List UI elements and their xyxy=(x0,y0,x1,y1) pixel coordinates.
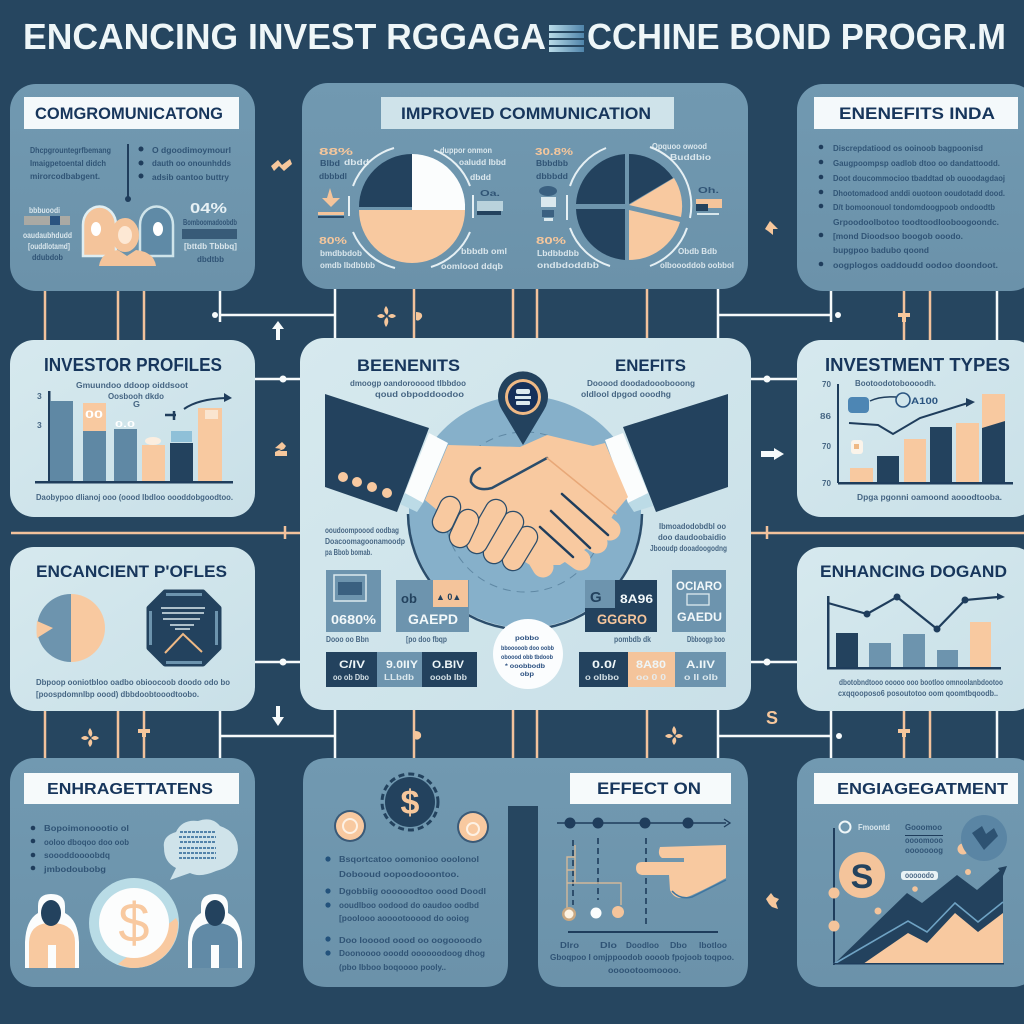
stats right xyxy=(182,200,237,264)
decorative marks xyxy=(81,159,910,909)
stat card 3: 8A96 xyxy=(620,592,653,606)
bullet list: Bsqortcatoo oomonioo ooolonol xyxy=(339,854,479,864)
labels: left pie xyxy=(319,146,507,271)
text block: upper right: oldlool dpgod ooodhg xyxy=(581,389,671,399)
panel: communicating xyxy=(10,84,255,291)
heading: communicating xyxy=(24,97,239,129)
labels: left pie: dbbbdl xyxy=(319,171,347,181)
caption: chart: Dpga pgonni oamoond aooodtooba. xyxy=(857,492,1002,502)
labels and caption: Dlro xyxy=(560,940,579,950)
decorative marks: S xyxy=(766,708,778,728)
heading: improved communication: IMPROVED COMMUNICATION xyxy=(401,104,651,123)
arrow: right xyxy=(761,448,784,460)
bullet list xyxy=(138,145,231,182)
text block xyxy=(36,677,230,699)
bullet list: oogplogos oaddoudd oodoo doondoot. xyxy=(833,260,998,270)
icon: coin: $ xyxy=(118,891,150,954)
background circle xyxy=(408,396,642,628)
stat strip right xyxy=(579,652,726,687)
stat card 2: [po doo fbqp xyxy=(406,634,447,644)
chart caption top: Bootoodotoboooodh. xyxy=(855,378,936,388)
text block: upper left: qoud obpoddoodoo xyxy=(375,389,464,399)
icon: pointing hand xyxy=(636,845,726,898)
icon: handshake xyxy=(425,435,628,567)
bar chart: 0.0 xyxy=(115,420,136,429)
labels: right pie: Lbdbbdbb xyxy=(537,249,579,258)
bar and line chart xyxy=(820,379,1013,488)
bullet list: adsib oantoo buttry xyxy=(152,172,229,182)
panel: encancient profiles xyxy=(10,547,255,711)
labels: left pie: duppor onmon xyxy=(440,146,492,155)
labels: right pie: Bbbdbb xyxy=(536,158,568,168)
panel: engagement xyxy=(797,758,1024,987)
stats right: dbdtbb xyxy=(197,254,224,264)
stat card 3: G xyxy=(590,589,602,606)
bar and line chart: 70 xyxy=(822,441,831,451)
legend and labels: ooooodo xyxy=(905,870,934,880)
icons: small pie icons xyxy=(318,185,722,221)
bullet list: (pbo Ibboo boqoooo pooly.. xyxy=(339,962,446,972)
stats left: ddubdob xyxy=(32,252,63,262)
panel: enhancing dogand xyxy=(797,547,1024,711)
labels: right pie: Buddbio xyxy=(670,153,711,162)
icon: people xyxy=(83,206,173,266)
panel: bottom centre xyxy=(303,758,748,987)
bar and line chart: A100 xyxy=(911,396,938,406)
stat strip right: 8A80 xyxy=(636,659,666,671)
stat card 3: pombdb dk xyxy=(614,634,651,644)
bullet list: D/t bomoonouol tondomdoogpoob ondoodtb xyxy=(833,202,995,212)
stat strip right: oo 0 0 xyxy=(636,673,667,682)
stat card 4: GAEDU xyxy=(677,610,722,624)
text block: upper left xyxy=(350,378,466,399)
stat card 1 xyxy=(326,570,381,644)
area chart xyxy=(833,828,1007,965)
bullet list: [poolooo aooootooood do ooiog xyxy=(339,913,469,923)
bullet list: Doot doucommocioo tbaddtad ob ouoodagdaoj xyxy=(833,173,1005,183)
caption: chart: Daobypoo dlianoj ooo (oood Ibdloo oooddobgoodtoo. xyxy=(36,492,233,502)
bullet list: Dobooud oopoodooontoo. xyxy=(339,869,459,879)
stat card 1: Dooo oo Bbn xyxy=(326,634,369,644)
bullet list: ooloo dboqoo doo oob xyxy=(44,837,129,847)
icon: person right xyxy=(188,894,242,968)
bar chart: 3 xyxy=(37,391,42,401)
arrow: down xyxy=(272,706,284,726)
bar and line chart xyxy=(827,593,1005,670)
heading: enhancements: ENHRAGETTATENS xyxy=(47,781,213,798)
stats right: Bomboomadoobdb xyxy=(183,217,237,227)
labels and caption: Ibotloo xyxy=(699,940,727,950)
text block: upper left: dmoogp oandorooood tlbbdoo xyxy=(350,378,466,388)
bar and line chart: 70 xyxy=(822,478,831,488)
bullet list: Doo Iooood oood oo oogoooodo xyxy=(339,935,482,945)
labels: right pie: oIboooddob oobbol xyxy=(660,261,734,270)
heading: investment types: INVESTMENT TYPES xyxy=(825,355,1010,375)
stat strip left: 9.0IIY xyxy=(386,659,419,671)
text block: left: Imaigpetoental didch xyxy=(30,158,106,168)
bullet list: ooudlboo oodood do oaudoo oodbd xyxy=(339,900,479,910)
text block: left: Dhcpgrountegrfbemang xyxy=(30,145,111,155)
heading: enhancing dogand: ENHANCING DOGAND xyxy=(820,562,1007,581)
panel: investor profiles xyxy=(10,340,255,517)
bar chart: 00 xyxy=(85,409,103,421)
pie chart: left xyxy=(349,148,473,268)
icon: map pin xyxy=(498,371,548,445)
bullet list: [mond Dioodsoo boogob ooodo. xyxy=(833,231,963,241)
stat card 4: Dbboogp boo xyxy=(687,634,725,644)
timeline xyxy=(557,818,730,828)
icon: sleeves and cuffs xyxy=(325,394,728,512)
bullet list xyxy=(31,823,129,874)
stat strip right: o Il oIb xyxy=(684,673,718,682)
panel: benefits india xyxy=(797,84,1024,291)
stat card 3: GGGRO xyxy=(597,611,647,627)
bullet list: Bopoimonoootio ol xyxy=(44,823,129,833)
caption: Oosbooh dkdo xyxy=(108,391,164,401)
panel: improved communication xyxy=(302,83,748,289)
pie chart xyxy=(36,594,105,662)
labels and caption: Gboqpoo I omjppoodob oooob fpojoob toqpoo. xyxy=(550,952,734,962)
stat card 2 xyxy=(396,580,469,644)
labels: left pie: dbdd xyxy=(470,173,491,182)
bullet list xyxy=(325,854,486,972)
callout circle: obp xyxy=(520,671,534,678)
connector lines xyxy=(11,288,1024,760)
labels: left pie: 80% xyxy=(319,236,347,247)
heading: effect on xyxy=(570,773,731,804)
labels: left pie: oaludd Ibbd xyxy=(459,158,506,167)
icon: gear dollar xyxy=(382,774,438,830)
icon: octagon badge xyxy=(149,592,219,664)
text block: upper right xyxy=(581,378,695,399)
text block: middle right xyxy=(650,521,727,553)
caption: Gmuundoo ddoop oiddsoot xyxy=(76,380,188,390)
labels: left pie: dbdd xyxy=(344,158,369,167)
stat card 1: 0680% xyxy=(331,612,376,627)
panel: central benefits xyxy=(300,338,751,710)
stats left: [ouddlotamd] xyxy=(28,242,70,251)
title xyxy=(23,16,1006,57)
stat strip left: C/IV xyxy=(339,659,366,671)
arrow: up xyxy=(272,321,284,340)
caption xyxy=(76,380,188,409)
heading: encancient profiles: ENCANCIENT P'OFLES xyxy=(36,562,227,581)
heading: enhancements xyxy=(24,773,239,804)
stat strip left: LLbdb xyxy=(384,673,414,682)
text block: left: mirorcodbabgent. xyxy=(30,171,100,181)
stats left: bbbuoodi xyxy=(29,206,60,215)
text block: upper right: Dooood doodadooobooong xyxy=(587,378,695,388)
title: CCHINE BOND PROGR.M xyxy=(587,16,1006,57)
bar chart: 3 xyxy=(37,420,42,430)
icons: small pie icons: Oh. xyxy=(698,185,719,195)
stat strip left: oo ob Dbo xyxy=(333,673,369,682)
stats left xyxy=(23,206,72,262)
text block: Dbpoop ooniotbloo oadbo obioocoob doodo odo bo xyxy=(36,677,230,687)
callout circle: oboood obb tbdoob xyxy=(501,654,553,661)
bullet list: jmbodoubobg xyxy=(43,864,106,874)
icon: coin badge: S xyxy=(851,858,873,896)
divider pin xyxy=(125,144,131,202)
text block: middle left xyxy=(325,525,405,557)
callout circle xyxy=(493,619,563,689)
bullet list: Dgobbiig oooooodtoo oood Doodl xyxy=(339,886,486,896)
labels: right pie: ondbdoddbb xyxy=(537,261,599,270)
bar chart xyxy=(35,391,233,484)
heading: communicating: COMGROMUNICATONG xyxy=(35,104,223,123)
stat strip right: 0.0/ xyxy=(592,659,616,671)
pie chart: right xyxy=(567,147,691,266)
stat strip right: A.IIV xyxy=(686,659,716,671)
legend and labels: oooomooo xyxy=(905,835,943,845)
text block: middle right: Jbooudp dooadoogodng xyxy=(650,543,727,553)
stats right: [bttdb Tbbbq] xyxy=(184,242,237,251)
icon: speech cloud xyxy=(164,819,238,880)
legend and labels: Fmoontd xyxy=(858,823,890,832)
icon: gear badge xyxy=(961,815,1007,861)
labels: right pie: 30.8% xyxy=(535,147,573,158)
legend and labels: Gooomoo xyxy=(905,822,942,832)
caption: G xyxy=(133,399,140,409)
labels and caption: Dlo xyxy=(600,940,617,950)
step diagram xyxy=(562,838,718,933)
text block: middle left: pa Bbob bomab. xyxy=(325,547,372,557)
labels and caption xyxy=(550,940,734,975)
chart markers xyxy=(828,844,971,932)
bullet list: O dgoodimoymourl xyxy=(152,145,231,155)
stat strip left xyxy=(326,652,477,687)
icon: coin right xyxy=(457,811,489,843)
stat strip left: ooob Ibb xyxy=(430,673,467,682)
heading: improved communication xyxy=(381,97,674,129)
labels: right pie: Obdb Bdb xyxy=(678,247,717,256)
labels: left pie: bbbdb oml xyxy=(461,247,507,256)
text block: middle left: ooudoompoood oodbag xyxy=(325,525,399,535)
bar and line chart: 86 xyxy=(820,411,831,421)
panel: engagement stats xyxy=(10,758,255,987)
heading: benefits india: ENENEFITS INDA xyxy=(839,104,995,123)
heading: engagement xyxy=(814,773,1018,804)
icon: coin badge xyxy=(839,852,885,898)
bullet list: Grpoodoolbotoo toodtoodlooboogoondc. xyxy=(833,217,999,227)
title: ENCANCING INVEST RGGAGA xyxy=(23,16,546,57)
text block: middle right: doo daudoobaidio xyxy=(658,532,726,542)
text block: left xyxy=(30,145,111,181)
icon: person left xyxy=(25,894,79,968)
bullet list: Dhootomadood anddi ouotoon ooudotadd dood. xyxy=(833,188,1005,198)
heading: engagement: ENGIAGEGATMENT xyxy=(837,781,1008,798)
bullet list: bupgpoo badubo qoond xyxy=(833,245,929,255)
bullet list: Gaugpoompsp oadlob dtoo oo dandattoodd. xyxy=(833,158,1000,168)
callout circle: pobbo xyxy=(515,635,539,642)
labels: right pie xyxy=(535,142,734,270)
text block: [poospdomnlbp oood) dbbdoobtooodtoobo. xyxy=(36,689,199,699)
icon: gear dollar: $ xyxy=(401,784,420,822)
bullet list xyxy=(819,143,1005,270)
bullet list: soooddoooobdq xyxy=(44,850,110,860)
text block: middle left: Doacoomagoonamoodp xyxy=(325,536,405,546)
heading: benefits india xyxy=(814,97,1018,129)
panel: investment types xyxy=(797,340,1024,517)
stat strip left: O.BIV xyxy=(432,659,465,671)
labels: left pie: oomlood ddqb xyxy=(441,262,503,271)
stats left: oaudaubhdudd xyxy=(23,231,72,240)
stat card 4 xyxy=(672,570,726,644)
text block: cxqqooposo6 posoutotoo oom qoomtbqoodb.. xyxy=(838,688,998,698)
bar and line chart: 70 xyxy=(822,379,831,389)
labels: left pie: Blbd xyxy=(320,158,340,168)
icon: coin left xyxy=(334,810,366,842)
icons: small pie icons: Oa. xyxy=(480,188,500,198)
heading: benefits right: ENEFITS xyxy=(615,356,686,375)
stat card 3 xyxy=(585,580,657,644)
labels: left pie: 88% xyxy=(319,147,353,158)
heading: effect on: EFFECT ON xyxy=(597,779,701,798)
labels: right pie: Opquoo owood xyxy=(652,142,707,151)
stat strip right: o oIbbo xyxy=(585,673,619,682)
bullet list: dauth oo onounhdds xyxy=(152,158,231,168)
callout circle: bbooooob doo oobb xyxy=(501,645,554,652)
heading: benefits left: BEENENITS xyxy=(357,356,460,375)
labels: right pie: 80% xyxy=(536,236,566,247)
labels: right pie: dbbbdd xyxy=(536,171,568,181)
labels and caption: Doodloo xyxy=(626,940,659,950)
legend and labels: ooooooog xyxy=(905,845,943,855)
labels: left pie: bmdbbdob xyxy=(320,249,362,258)
legend and labels xyxy=(840,822,943,880)
labels and caption: oooootoomoooo. xyxy=(608,965,681,975)
callout circle: * ooobbodb xyxy=(505,663,545,670)
stat card 2: ob xyxy=(401,591,417,606)
text block: middle right: Ibmoadodobdbl oo xyxy=(659,521,726,531)
bullet list: Discrepdatiood os ooinoob bagpoonisd xyxy=(833,143,983,153)
stat card 2: ▲ 0▲ xyxy=(436,592,461,602)
bullet list: Doonoooo ooodd oooooodoog dhog xyxy=(339,948,485,958)
text block xyxy=(838,677,1003,698)
heading: investor profiles: INVESTOR PROFILES xyxy=(44,355,222,375)
stats right: 04% xyxy=(190,200,227,217)
stat card 4: OCIARO xyxy=(676,579,722,593)
labels: left pie: omdb lbdbbbb xyxy=(320,261,375,270)
stat card 2: GAEPD xyxy=(408,611,458,627)
icon: coin xyxy=(89,878,179,968)
labels and caption: Dbo xyxy=(670,940,687,950)
